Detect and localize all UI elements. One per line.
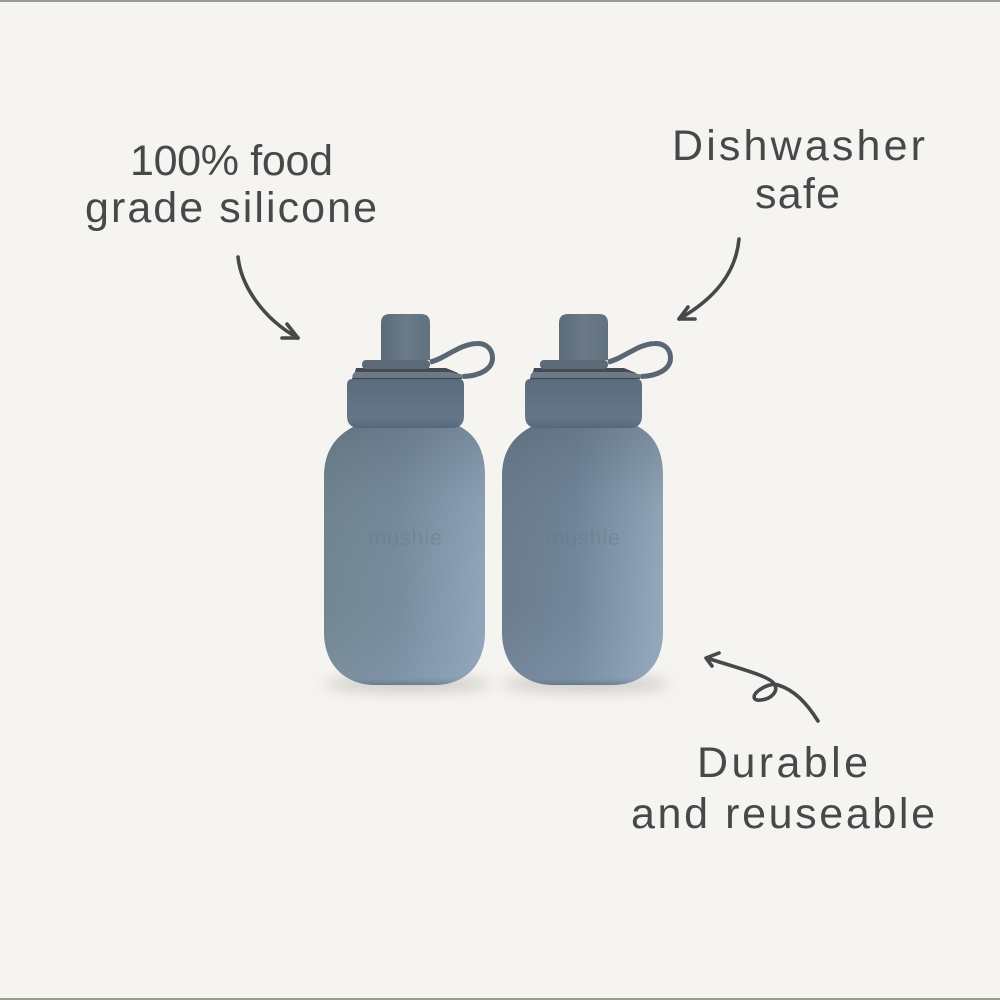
strap loop bbox=[608, 343, 670, 376]
ring shadow line bbox=[352, 378, 462, 380]
brand mark: mushie bbox=[546, 525, 620, 550]
callout: dishwasher safe bbox=[672, 122, 925, 319]
arrow: looping to bottles bbox=[706, 653, 818, 721]
lid ring bbox=[530, 372, 643, 379]
bottle: left bbox=[324, 314, 492, 692]
callout text: grade silicone bbox=[85, 184, 377, 232]
top border bbox=[0, 0, 1000, 2]
lid gap bbox=[532, 368, 636, 376]
strap loop bbox=[430, 343, 492, 376]
spout bbox=[381, 314, 430, 360]
flange bbox=[362, 360, 430, 369]
ring shadow line bbox=[530, 378, 640, 380]
body shading bbox=[502, 425, 663, 685]
bottle body bbox=[502, 425, 663, 685]
bottle body bbox=[324, 425, 485, 685]
collar bbox=[347, 379, 464, 428]
brand mark: mushie bbox=[368, 525, 442, 550]
callout text: Dishwasher bbox=[672, 122, 925, 170]
callout text: Durable bbox=[697, 739, 868, 787]
callout text bbox=[631, 739, 935, 838]
flange bbox=[540, 360, 608, 369]
floor shadow bbox=[324, 676, 492, 692]
callout text bbox=[672, 122, 925, 218]
spout bbox=[559, 314, 608, 360]
bottle: right bbox=[502, 314, 670, 692]
body shading bbox=[324, 425, 485, 685]
arrow: to left bottle bbox=[238, 257, 298, 338]
arrow: to right bottle bbox=[679, 239, 739, 319]
callout: durable and reuseable bbox=[631, 653, 935, 838]
callout text: safe bbox=[755, 170, 840, 218]
collar bbox=[525, 379, 642, 428]
lid gap bbox=[354, 368, 458, 376]
bottom border bbox=[0, 998, 1000, 1000]
callout text bbox=[85, 137, 377, 232]
floor shadow bbox=[502, 676, 670, 692]
callout: 100% food grade silicone bbox=[85, 137, 377, 338]
callout text: 100% food bbox=[130, 137, 333, 185]
callout text: and reuseable bbox=[631, 790, 935, 838]
lid ring bbox=[352, 372, 465, 379]
